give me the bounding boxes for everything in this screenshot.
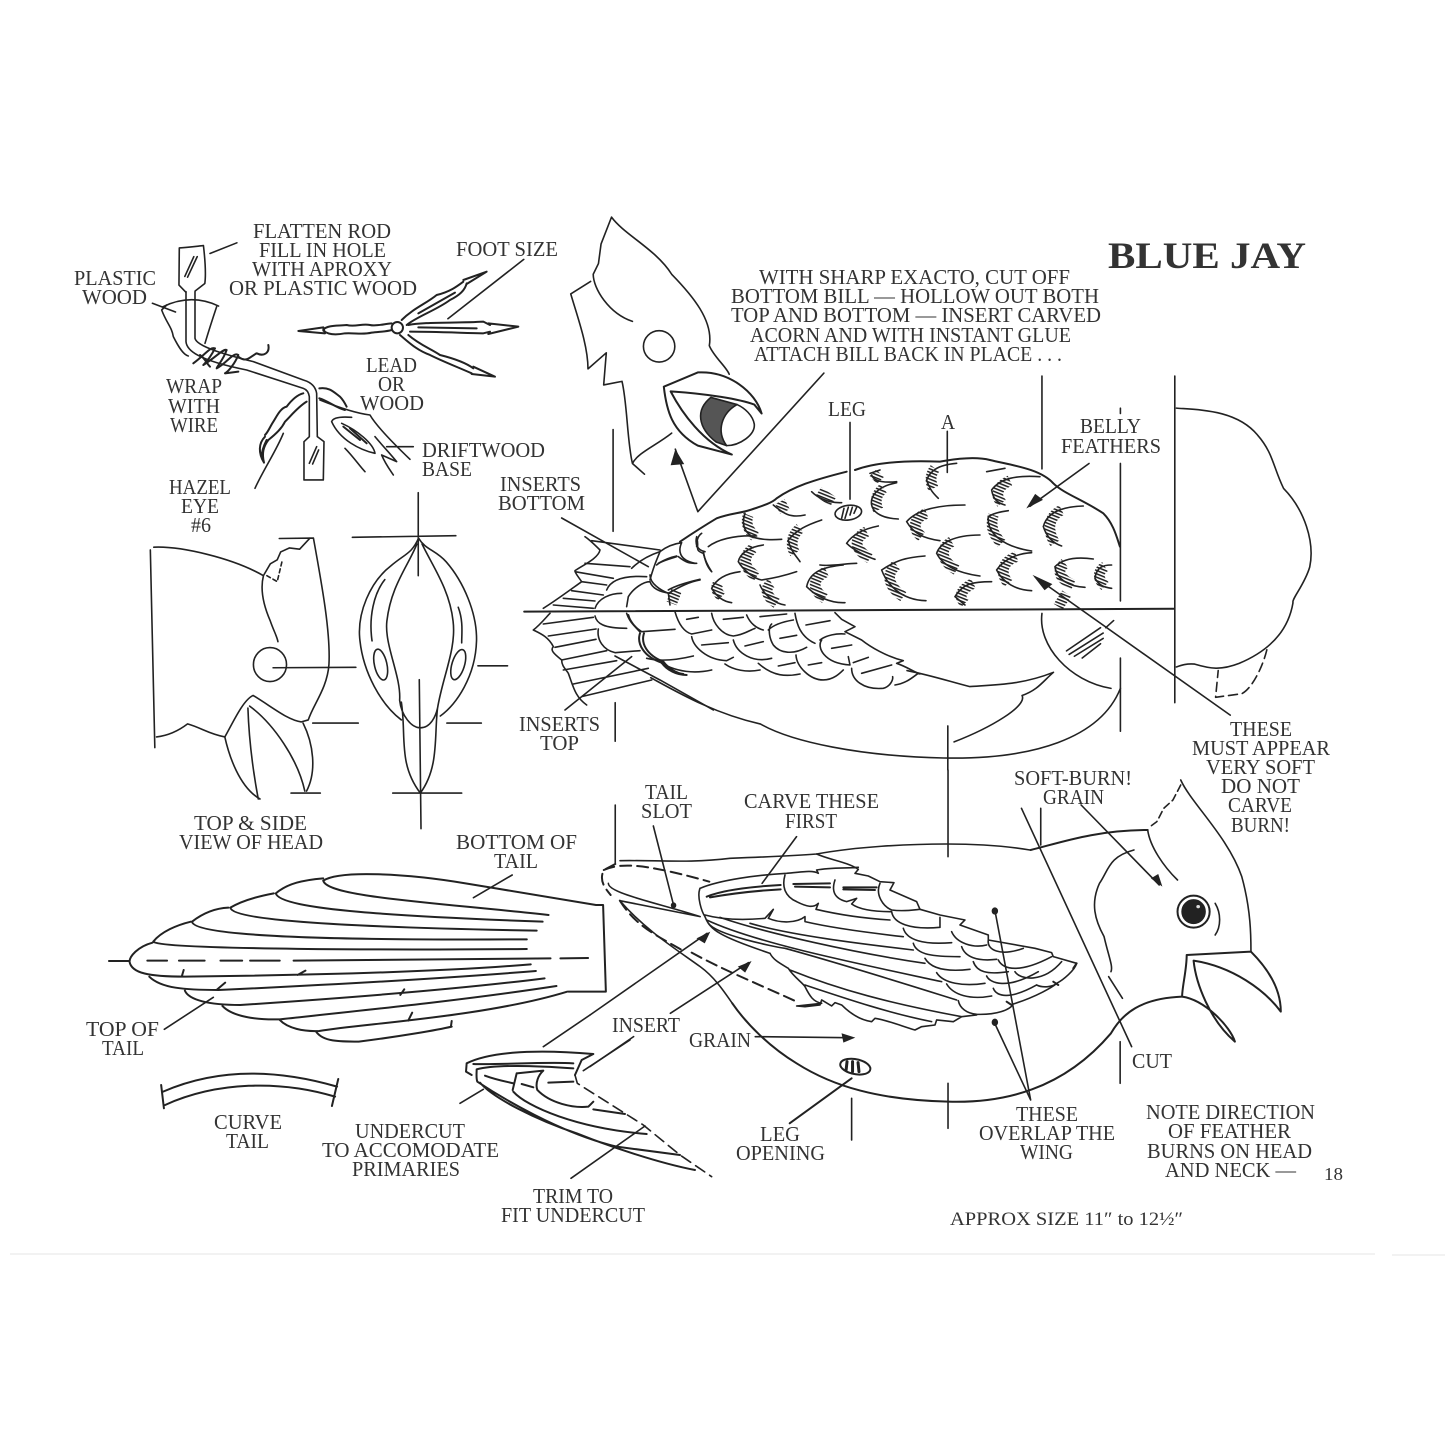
label: leg: LEG	[828, 397, 866, 421]
icon: driftwood	[320, 400, 413, 475]
label: plastic wood: PLASTIC	[74, 266, 156, 290]
label: these overlap the wing	[979, 1102, 1115, 1164]
primaries	[707, 917, 977, 1030]
text block: exacto instructions	[731, 265, 1101, 366]
tail slot and dashed tail outline	[602, 864, 709, 950]
label: A: A	[941, 410, 956, 434]
icon: wire coil	[193, 345, 269, 373]
text block: exacto instructions: BOTTOM BILL — HOLLOW OUT BOTH	[731, 284, 1099, 308]
feather arcs	[650, 463, 1112, 605]
coverts	[705, 875, 1062, 997]
label: belly feathers	[1061, 414, 1161, 458]
text block: exacto instructions: TOP AND BOTTOM — INSERT CARVED	[731, 303, 1101, 327]
text block: note direction of feather burns: BURNS ON HEAD	[1147, 1139, 1312, 1163]
arrow: belly feathers	[1030, 463, 1089, 506]
icon: eye	[1178, 896, 1220, 935]
label: top of tail	[86, 1017, 159, 1060]
label: top and side view of head	[179, 811, 323, 854]
text block: note direction of feather burns	[1146, 1100, 1315, 1182]
arrow: bill callout	[675, 373, 824, 512]
label: hazel eye	[169, 475, 231, 537]
label: bottom of tail: BOTTOM OF	[456, 830, 577, 854]
body outline	[680, 458, 1120, 547]
icon: right toe	[319, 388, 347, 410]
callout lines	[590, 770, 1159, 1140]
label: bottom of tail	[456, 830, 577, 873]
label: bottom of tail: TAIL	[494, 849, 538, 873]
back line	[620, 844, 1030, 861]
icon: dots	[671, 902, 998, 1026]
label: flatten rod: OR PLASTIC WOOD	[229, 276, 417, 300]
text block: note direction of feather burns: OF FEATHER	[1168, 1119, 1291, 1143]
label: cut: CUT	[1132, 1049, 1172, 1073]
text block: note direction of feather burns: NOTE DIRECTION	[1146, 1100, 1315, 1124]
panel: tail and lower body feathers	[533, 518, 920, 710]
text block: must appear very soft: CARVE	[1228, 793, 1292, 817]
panel: tail feathers	[109, 874, 606, 1042]
icon: open bill	[664, 372, 762, 455]
icon: leg hole	[834, 504, 863, 522]
icon: leg opening	[837, 1056, 873, 1077]
label: lead or wood	[360, 353, 424, 415]
label: inserts bottom: INSERTS	[500, 472, 581, 496]
label: undercut to accomodate primaries: UNDERCUT	[355, 1119, 465, 1143]
label: curve tail	[214, 1110, 282, 1153]
label: curve tail: TAIL	[226, 1129, 269, 1153]
label: trim to fit undercut: FIT UNDERCUT	[501, 1203, 645, 1227]
label: flatten rod: FLATTEN ROD	[253, 219, 391, 243]
label: belly feathers: FEATHERS	[1061, 434, 1161, 458]
icon: leader lines	[152, 243, 524, 319]
icon: left toe	[298, 323, 392, 334]
dashed wing insert	[692, 953, 797, 1002]
label: grain: GRAIN	[689, 1028, 751, 1052]
lower tail fan	[533, 613, 713, 710]
label: inserts bottom: BOTTOM	[498, 491, 585, 515]
label: lead or wood: WOOD	[360, 391, 424, 415]
page number: 18	[1324, 1164, 1343, 1184]
text block: note direction of feather burns: AND NECK —	[1165, 1158, 1297, 1182]
label: tail slot: SLOT	[641, 799, 692, 823]
label: tail slot	[641, 780, 692, 823]
label: top of tail: TAIL	[102, 1036, 144, 1060]
icon: open bill	[1182, 952, 1281, 1042]
panel: top view of head	[352, 493, 508, 829]
text block: exacto instructions: WITH SHARP EXACTO, CUT OFF	[759, 265, 1070, 289]
icon: left eye	[371, 647, 390, 682]
crest and cheek	[1094, 780, 1251, 998]
label: top and side view of head: TOP & SIDE	[194, 811, 307, 835]
icon: chest profile	[1176, 408, 1311, 668]
arrow: these must appear very soft	[1035, 577, 1230, 715]
label: belly feathers: BELLY	[1080, 414, 1141, 438]
label: hazel eye: EYE	[181, 494, 219, 518]
label: flatten rod	[229, 219, 417, 300]
arrow: insert 2	[670, 963, 748, 1013]
panel: undercut wing insert	[460, 1015, 712, 1178]
label: tail slot: TAIL	[645, 780, 688, 804]
upper tail fan	[543, 518, 712, 608]
icon: plug sides	[162, 305, 217, 356]
label: trim to fit undercut	[501, 1184, 645, 1227]
thick double edge	[628, 615, 687, 675]
text block: must appear very soft: DO NOT	[1221, 774, 1300, 798]
label: undercut to accomodate primaries: PRIMARIES	[352, 1157, 460, 1181]
icon: middle toe	[408, 322, 518, 334]
label: soft-burn grain	[1014, 766, 1132, 809]
label: leg opening	[736, 1122, 825, 1165]
icon: rod	[186, 292, 324, 480]
panel: body top view feathers	[650, 458, 1120, 607]
label: lead or wood: OR	[378, 372, 405, 396]
label: curve tail: CURVE	[214, 1110, 282, 1134]
label: plastic wood	[74, 266, 156, 309]
icon: right eye	[448, 647, 469, 682]
label: undercut to accomodate primaries: TO ACCOMODATE	[322, 1138, 499, 1162]
arrow: insert 1	[590, 933, 707, 1015]
label: wrap with wire: WITH	[168, 394, 220, 418]
label: hazel eye: #6	[191, 513, 211, 537]
panel: divider lines and chest profile	[524, 376, 1311, 770]
text block: must appear very soft: THESE	[1230, 717, 1292, 741]
title: BLUE JAY	[1108, 236, 1306, 277]
label: carve these first	[744, 789, 879, 833]
label: wrap with wire: WRAP	[166, 374, 222, 398]
text block: must appear very soft: VERY SOFT	[1206, 755, 1315, 779]
body outline	[732, 830, 1182, 1102]
label: these overlap the wing: WING	[1020, 1140, 1073, 1164]
label: top of tail: TOP OF	[86, 1017, 159, 1041]
icon: eye	[643, 331, 675, 362]
icon: rod paddle top	[179, 246, 205, 292]
icon: curve tail	[161, 1074, 338, 1108]
icon: acorn	[701, 397, 737, 446]
label: leg opening: LEG	[760, 1122, 800, 1146]
label: inserts top: INSERTS	[519, 712, 600, 736]
label: inserts top: TOP	[540, 731, 579, 755]
arrow: grain	[755, 1036, 847, 1039]
label: carve these first: FIRST	[785, 809, 837, 833]
label: wrap with wire	[166, 374, 222, 437]
label: flatten rod: FILL IN HOLE	[259, 238, 386, 262]
icon: plug top	[163, 300, 219, 307]
label: inserts bottom	[498, 472, 585, 515]
outer wing edge	[699, 854, 1077, 1014]
label: top and side view of head: VIEW OF HEAD	[179, 830, 323, 854]
label: driftwood base: BASE	[422, 457, 472, 481]
icon: left toe and claw	[260, 393, 307, 463]
label: undercut to accomodate primaries	[322, 1119, 499, 1181]
icon: lower toe	[400, 335, 495, 377]
text block: must appear very soft: BURN!	[1231, 813, 1290, 837]
label: driftwood base	[422, 438, 545, 481]
label: insert: INSERT	[612, 1013, 680, 1037]
icon: upper toe	[402, 272, 487, 325]
lower feather rows	[595, 612, 920, 688]
panel: rod, wire wrap, lower foot and driftwood	[162, 292, 413, 488]
label: driftwood base: DRIFTWOOD	[422, 438, 545, 462]
panel: head with acorn in bill	[571, 217, 824, 512]
panel: rod top and plastic wood plug	[152, 243, 524, 319]
body outline, bottom half right	[651, 613, 1120, 758]
label: leg opening: OPENING	[736, 1141, 825, 1165]
label: approximate size: APPROX SIZE 11″ to 12½″	[950, 1209, 1183, 1230]
label: foot size: FOOT SIZE	[456, 237, 558, 261]
label: flatten rod: WITH APROXY	[252, 257, 392, 281]
label: hazel eye: HAZEL	[169, 475, 231, 499]
label: lead or wood: LEAD	[366, 353, 417, 377]
panel: full side view of bird	[590, 770, 1281, 1140]
icon: joint	[392, 322, 403, 333]
text block: must appear very soft	[1192, 717, 1330, 837]
label: wrap with wire: WIRE	[170, 413, 218, 437]
panel: foot size drawing	[298, 272, 518, 377]
text block: exacto instructions: ACORN AND WITH INSTANT GLUE	[750, 323, 1071, 347]
label: soft-burn grain: GRAIN	[1043, 785, 1104, 809]
feather hatching	[672, 468, 1105, 607]
label: these overlap the wing: OVERLAP THE	[979, 1121, 1115, 1145]
label lines	[164, 875, 512, 1029]
label: inserts top	[519, 712, 600, 755]
arrow: soft-burn grain	[1151, 874, 1162, 887]
text block: exacto instructions: ATTACH BILL BACK IN PLACE . . .	[754, 342, 1062, 366]
text block: must appear very soft: MUST APPEAR	[1192, 736, 1330, 760]
icon: eye	[253, 648, 287, 682]
label: soft-burn grain: SOFT-BURN!	[1014, 766, 1132, 790]
panel: side view of head	[150, 538, 358, 799]
panel: wing	[620, 844, 1077, 1030]
label: carve these first: CARVE THESE	[744, 789, 879, 813]
label: trim to fit undercut: TRIM TO	[533, 1184, 613, 1208]
label: these overlap the wing: THESE	[1016, 1102, 1078, 1126]
label: plastic wood: WOOD	[82, 285, 147, 309]
